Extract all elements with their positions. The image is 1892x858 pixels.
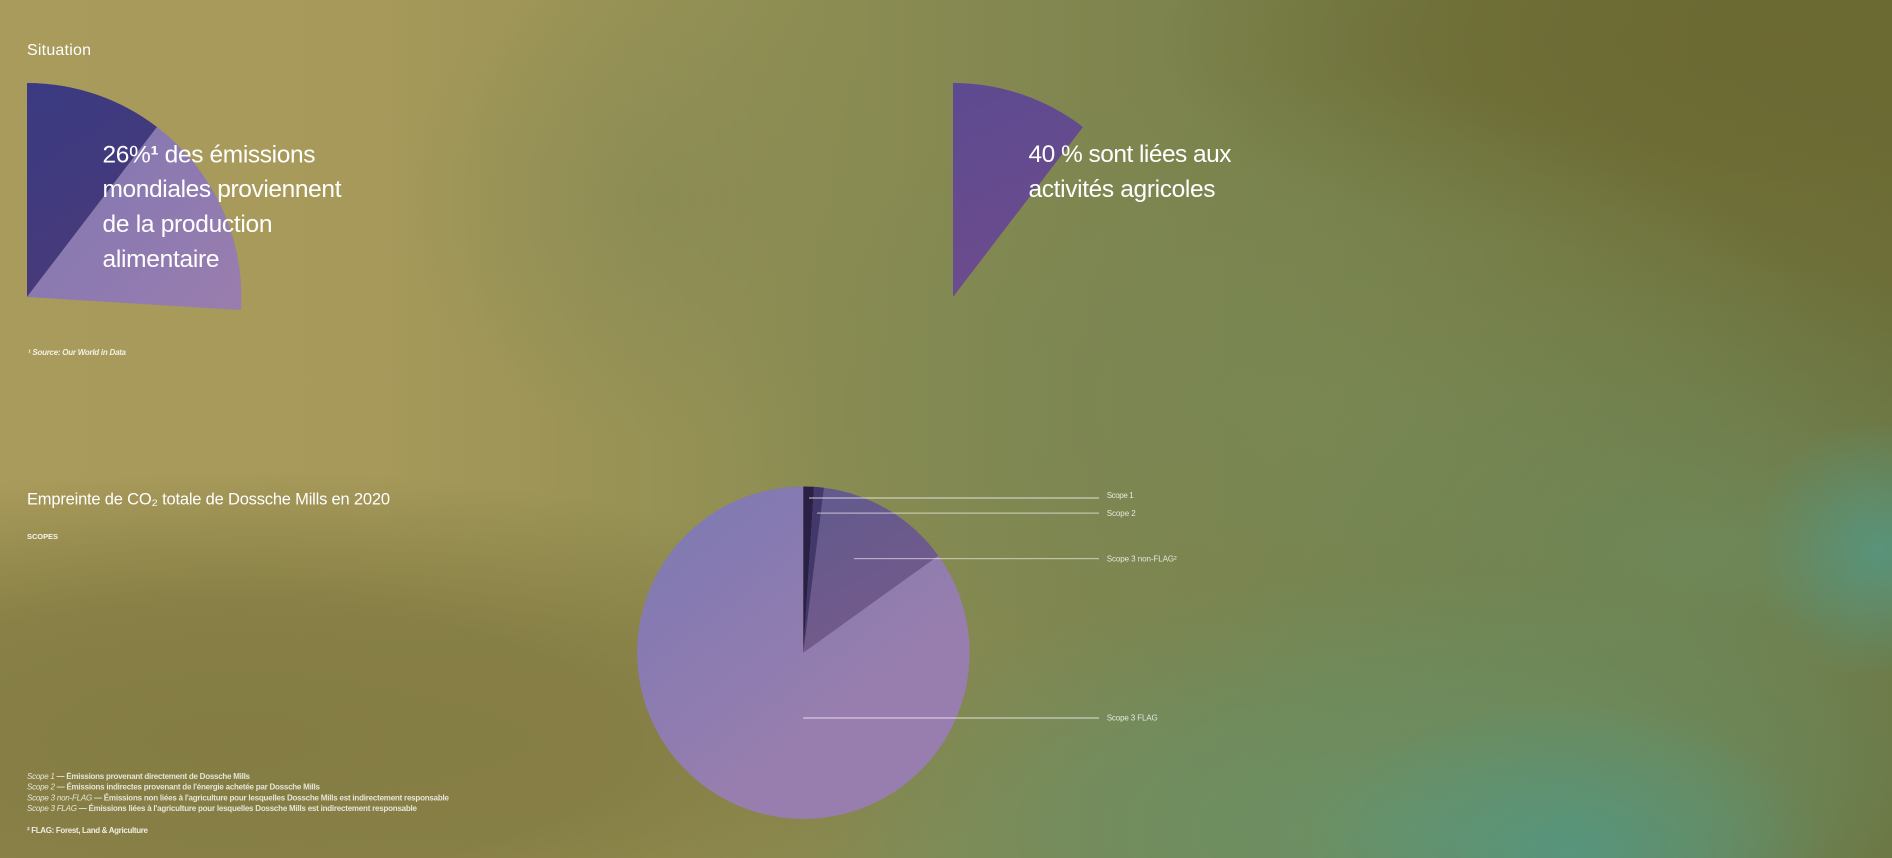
slice: Scope 1 <box>803 486 814 653</box>
legend: scope definitions <box>27 772 450 813</box>
slice: Scope 2 <box>803 487 824 653</box>
text block: 26% statement <box>102 141 342 273</box>
legend: scope definitions: Scope 1 — Émissions provenant directement de Dossche Mills <box>27 772 251 781</box>
text block: 40% statement <box>1028 141 1232 203</box>
slice: remaining food production share <box>27 127 241 310</box>
label: Scope 3 non-FLAG: Scope 3 non-FLAG² <box>1107 554 1177 564</box>
legend: scope definitions: Scope 3 FLAG — Émissions liées à l'agriculture pour lesquelles Dossche Mills est indirectement responsable <box>27 804 418 813</box>
label: Scope 3 FLAG: Scope 3 FLAG <box>1107 714 1158 723</box>
pie chart: scopes breakdown <box>637 486 970 819</box>
legend: scope definitions: Scope 3 non-FLAG — Émissions non liées à l'agriculture pour lesquelles Dossche Mills est indirectement responsable <box>27 794 450 803</box>
slice: agriculture share of food emissions <box>27 83 157 297</box>
text block: 26% statement: de la production <box>102 211 272 238</box>
text block: 26% statement: mondiales proviennent <box>102 176 342 203</box>
leader line: Scope 3 non-FLAG <box>854 558 1099 559</box>
text block: 40% statement: 40 % sont liées aux <box>1028 141 1232 168</box>
heading: CO2 footprint: Empreinte de CO₂ totale de Dossche Mills en 2020 <box>27 490 390 508</box>
footnote: FLAG definition: ² FLAG: Forest, Land & Agriculture <box>27 826 149 835</box>
heading: Situation: Situation <box>27 42 91 59</box>
text block: 26% statement: alimentaire <box>102 246 220 273</box>
leader line: Scope 1 <box>809 497 1099 499</box>
text block: 26% statement: 26%¹ des émissions <box>102 141 316 168</box>
label: Scope 1: Scope 1 <box>1107 491 1134 500</box>
footnote: source: ¹ Source: Our World in Data <box>28 348 127 357</box>
slice: Scope 3 FLAG <box>637 486 970 819</box>
legend: scope definitions: Scope 2 — Émissions indirectes provenant de l'énergie achetée par Dossche Mills <box>27 783 321 792</box>
leader line: Scope 3 FLAG <box>803 717 1099 719</box>
label: Scope 2: Scope 2 <box>1107 509 1136 518</box>
slice: Scope 3 non-FLAG <box>803 488 938 653</box>
leader line: Scope 2 <box>817 513 1099 514</box>
pie chart: 26% of global emissions <box>27 83 241 310</box>
text block: 40% statement: activités agricoles <box>1028 176 1216 203</box>
pie chart: 40% agricultural activities <box>953 83 1083 297</box>
subheading: scopes: SCOPES <box>27 532 58 541</box>
